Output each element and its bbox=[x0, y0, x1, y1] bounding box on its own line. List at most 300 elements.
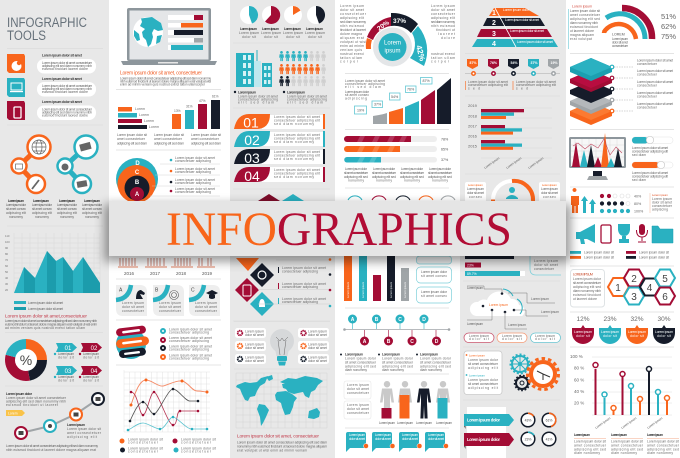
line chart legend: Lorem ipsum dolor sit bbox=[128, 438, 163, 442]
sliders: sed diam bbox=[632, 178, 646, 182]
y axis: 50 bbox=[5, 270, 9, 274]
dot rating: 80% bbox=[634, 202, 642, 206]
bar chart: 47% bbox=[199, 99, 206, 103]
yellow tag bbox=[6, 410, 25, 416]
note text: sit amet consec bbox=[345, 93, 369, 97]
outlined pills: dolor sit bbox=[469, 337, 489, 341]
person gauge: Lorem ipsum bbox=[541, 187, 558, 191]
hexagon cluster: 6 bbox=[662, 292, 668, 303]
sliders: consectetuer adipiscing elit bbox=[632, 150, 668, 154]
step note: adipiscing elit bbox=[67, 435, 97, 439]
rising bar chart: 76% bbox=[407, 88, 415, 92]
grouped bar chart: Lorem ipsum bbox=[483, 156, 501, 170]
lollipop chart: 60 % bbox=[574, 378, 584, 382]
lollipop chart: 80 % bbox=[574, 366, 584, 370]
diamond icons: consectetuer adipiscing bbox=[282, 285, 318, 289]
tall bars: Lorem ipsum bbox=[361, 281, 365, 298]
pyramid bbox=[472, 8, 558, 48]
title: INFOGRAPHIC bbox=[7, 15, 87, 30]
percent drops: Lorem ipsum bbox=[601, 330, 619, 334]
diamond icons: consectetuer adipiscing bbox=[282, 270, 318, 274]
heading: Lorem ipsum bbox=[572, 4, 592, 8]
progress bars: Lorem ipsum dolor bbox=[401, 167, 424, 171]
pie charts: Lorem ipsum bbox=[305, 31, 325, 35]
y axis: 30 bbox=[5, 282, 9, 286]
circle timeline: C bbox=[410, 339, 414, 345]
progress bars: Lorem ipsum dolor bbox=[429, 167, 452, 171]
cloud diagram: Lorem ipsum bbox=[531, 297, 549, 301]
side text columns: dolore magna bbox=[340, 32, 362, 36]
progress tags: 89.7% bbox=[467, 272, 477, 276]
speech bubbles: Lorem ipsum bbox=[402, 433, 418, 437]
bottom text bbox=[6, 444, 98, 452]
rating note: consectetuer bbox=[652, 204, 673, 208]
grouped bar chart: 2019 bbox=[468, 103, 478, 108]
layer text: Lorem ipsum dolor sit amet bbox=[637, 91, 673, 95]
panel: right column top bbox=[568, 4, 676, 347]
numbered ribbons: Lorem ipsum dolor sit amet bbox=[274, 150, 320, 154]
bulb cards: Lorem ipsum bbox=[308, 330, 327, 334]
sliders: consectetuer adipiscing elit bbox=[632, 174, 668, 178]
center caption bbox=[612, 32, 629, 48]
three text columns: amet consectetuer bbox=[154, 137, 183, 141]
three text columns: Lorem ipsum dolor sit bbox=[117, 133, 147, 137]
teal node network bbox=[58, 136, 98, 193]
diamond icons bbox=[235, 258, 331, 316]
timeline notes: diam nonummy bbox=[382, 368, 404, 372]
year ticks: 2019 bbox=[202, 271, 213, 276]
pie charts: Lorem ipsum bbox=[262, 27, 279, 31]
sliders: sed diam bbox=[632, 153, 646, 157]
cards A B C: consectetuer bbox=[195, 309, 218, 313]
sphere legend: Lorem ipsum dolor sit amet bbox=[169, 344, 212, 348]
timeline notes: Lorem ipsum bbox=[420, 352, 438, 356]
progress bars: 78% bbox=[441, 138, 449, 142]
horizontal bars: Lorem bbox=[135, 107, 145, 111]
cards A B C: dolor sit amet bbox=[122, 305, 144, 309]
speech bubbles: Lorem ipsum bbox=[375, 433, 391, 437]
progress bars: Lorem ipsum dolor bbox=[373, 167, 396, 171]
cloud diagram: Lorem ipsum bbox=[508, 323, 526, 327]
four text columns: Lorem ipsum dolor bbox=[57, 203, 78, 207]
bulb cards: dolor sit amet bbox=[308, 333, 327, 337]
three text notes: Lorem ipsum dolor sit bbox=[574, 440, 606, 444]
timeline notes: Lorem ipsum dolor bbox=[382, 356, 414, 360]
y axis: 20 bbox=[5, 288, 9, 292]
two bullet notes: elit sed diam bbox=[238, 100, 274, 104]
pyramid: 2 bbox=[492, 20, 496, 27]
two bullet notes: consectetuer adipiscing bbox=[238, 98, 278, 102]
three text notes: diam nonummy bbox=[647, 451, 673, 455]
gear note card: Lorem ipsum dolor bbox=[468, 378, 499, 382]
y axis: 60 bbox=[5, 264, 9, 268]
center caption: Lorem ipsum bbox=[612, 37, 628, 41]
people figures: Lorem ipsum bbox=[397, 421, 413, 425]
speech bubbles: dolor sit amet bbox=[402, 437, 418, 441]
year ticks: 2018 bbox=[176, 271, 187, 276]
tall bars: Lorem ipsum bbox=[346, 281, 350, 298]
y axis bbox=[5, 234, 10, 292]
sliders: Lorem ipsum dolor sit amet bbox=[632, 146, 668, 150]
bulb cards: dolor sit amet bbox=[308, 359, 327, 363]
teal note cards: Lorem ipsum dolor bbox=[421, 290, 448, 294]
four text columns: Lorem ipsum bbox=[33, 199, 49, 203]
person gauge: consec bbox=[469, 195, 482, 199]
cloud diagram: Lorem ipsum bbox=[467, 286, 483, 290]
semicircle progress bbox=[604, 8, 652, 39]
lorem card: diam nonummy nibh bbox=[573, 289, 601, 293]
progress bars: 37% bbox=[441, 158, 449, 162]
step note: Lorem ipsum dolor sit bbox=[67, 427, 101, 431]
lorem card: sit amet consectetuer bbox=[573, 281, 602, 285]
arrow labels: Lorem ipsum bbox=[83, 352, 99, 356]
timeline notes: Lorem ipsum dolor bbox=[420, 356, 452, 360]
percent drops: dolor sit bbox=[630, 334, 644, 338]
timeline notes: sit amet consectetuer bbox=[382, 360, 414, 364]
line chart legend: consectetuer bbox=[181, 440, 212, 444]
two bullet notes: consectetuer adipiscing bbox=[287, 98, 327, 102]
step tags: 87% bbox=[470, 61, 477, 65]
grid bbox=[14, 233, 100, 293]
area chart bbox=[14, 251, 100, 293]
cloud diagram bbox=[467, 286, 559, 329]
bulb cards: dolor sit amet bbox=[245, 346, 264, 350]
radial percent chart: 37% bbox=[393, 18, 406, 25]
legend list: Lorem ipsum dolor sit amet bbox=[175, 167, 215, 171]
text block: Lorem ipsum dolor sit amet consectetuer adipiscing elit sed diam nonummy nibh bbox=[5, 319, 97, 323]
progress tags bbox=[465, 256, 525, 276]
map heading: Lorem ipsum dolor sit amet, consectetuer bbox=[237, 434, 319, 440]
tool list: Lorem ipsum dolor sit amet consectetuer bbox=[42, 84, 93, 88]
three text columns: adipiscing elit sed diam bbox=[117, 142, 147, 146]
people note cards: Lorem ipsum bbox=[347, 383, 369, 387]
three text notes: amet consectetuer bbox=[611, 444, 644, 448]
note card: dolor sit amet bbox=[534, 263, 558, 267]
side text columns: adipiscing elit bbox=[340, 16, 364, 20]
numbered ribbons bbox=[234, 114, 325, 184]
legend list: Lorem ipsum dolor sit amet bbox=[175, 156, 215, 160]
circle timeline: A bbox=[363, 339, 367, 345]
pie charts: Lorem ipsum bbox=[284, 27, 301, 31]
arrow labels: dolor sit bbox=[83, 356, 99, 360]
hexagon cluster: 4 bbox=[647, 283, 653, 294]
lorem card bbox=[570, 270, 604, 307]
text block: ad minim veniam quis nostrud exerci tation ullam bbox=[5, 326, 85, 330]
pyramid: Lorem ipsum dolor sit amet bbox=[505, 18, 539, 22]
speech bubbles: Lorem ipsum bbox=[349, 433, 365, 437]
tool list: adipiscing elit sed diam nonummy nibh bbox=[42, 64, 92, 68]
pie charts: Lorem ipsum bbox=[240, 27, 257, 31]
rising bar chart bbox=[354, 78, 451, 124]
note card: consectetuer bbox=[534, 267, 555, 271]
y axis: 80 bbox=[5, 252, 9, 256]
horizontal bars: Lorem bbox=[139, 113, 149, 117]
person gauge: dolor sit amet bbox=[467, 191, 484, 195]
side note: euismod tincidunt bbox=[570, 25, 598, 29]
icon legend: Lorem ipsum dolor sit bbox=[584, 250, 614, 254]
center caption: LOREM bbox=[612, 32, 625, 36]
light bulb bbox=[270, 329, 294, 366]
arrow labels: Lorem ipsum bbox=[58, 375, 74, 379]
lollipop chart: 100 % bbox=[570, 354, 583, 359]
legend list: consectetuer adipiscing bbox=[175, 181, 211, 185]
sliders bbox=[632, 136, 673, 182]
side note: amet consectetuer bbox=[570, 13, 601, 17]
text block: Lorem ipsum dolor sit amet consectetuer adipiscing elit sed diam nonummy bbox=[120, 76, 211, 80]
lollipop chart: Lorem ipsum bbox=[594, 416, 612, 430]
progress bars: sit amet consectetuer bbox=[400, 171, 425, 175]
cards A B C: Lorem ipsum bbox=[122, 301, 144, 305]
grouped bar chart: Lorem ipsum bbox=[527, 156, 545, 170]
monitor chart bbox=[569, 133, 626, 180]
panel: tall bars and timeline bbox=[340, 256, 452, 452]
timeline text: Lorem ipsum dolor bbox=[6, 392, 33, 396]
numbered ribbons: 04 bbox=[244, 168, 260, 184]
pyramid: Lorem ipsum dolor sit amet bbox=[517, 40, 553, 44]
percentage rings: 41% bbox=[546, 437, 552, 441]
side text columns: Lorem ipsum bbox=[340, 4, 364, 8]
arrow labels: dolor sit bbox=[58, 356, 74, 360]
gear note card: Lorem ipsum dolor bbox=[468, 358, 499, 362]
tool list: Lorem ipsum dolor sit amet bbox=[42, 100, 83, 104]
cards A B C bbox=[116, 285, 220, 316]
timeline notes: Lorem ipsum dolor bbox=[345, 356, 377, 360]
bottom text: nibh euismod tincidunt ut laoreet dolore magna aliquam erat bbox=[6, 448, 96, 452]
circle timeline: B bbox=[375, 317, 379, 323]
three text notes: amet consectetuer bbox=[574, 444, 607, 448]
four text columns: nonummy bbox=[9, 215, 23, 219]
pie charts: dolor sit bbox=[242, 35, 256, 39]
three text columns: adipiscing elit sed diam bbox=[154, 142, 184, 146]
cards A B C: dolor sit amet bbox=[195, 305, 217, 309]
progress bars: sit amet consectetuer bbox=[372, 171, 397, 175]
year ticks: 2017 bbox=[150, 271, 161, 276]
bar chart: 31% bbox=[186, 104, 193, 108]
sphere legend: consectetuer adipiscing bbox=[169, 339, 209, 343]
side text columns: laoreet bbox=[438, 32, 455, 36]
three text notes: Lorem ipsum bbox=[574, 433, 590, 437]
four text columns bbox=[6, 199, 103, 219]
step tags: consectetuer adipiscing elit bbox=[516, 83, 556, 87]
side note: ut laoreet dolore bbox=[570, 29, 594, 33]
ribbons: Lorem ipsum dolor bbox=[467, 418, 500, 422]
tool list: Lorem ipsum dolor sit amet bbox=[42, 77, 83, 81]
arrow labels bbox=[54, 343, 102, 382]
three text columns: Lorem ipsum dolor sit bbox=[154, 133, 184, 137]
diamond icons: consectetuer adipiscing bbox=[282, 300, 318, 304]
person gauge: Lorem ipsum bbox=[467, 187, 484, 191]
bar chart: 61% bbox=[212, 94, 219, 98]
note text: elit sed diam bbox=[345, 85, 381, 89]
panel: years and line chart bbox=[116, 258, 220, 454]
gear note card: Lorem ipsum bbox=[469, 354, 486, 358]
timeline notes: sit amet consectetuer bbox=[420, 360, 452, 364]
text block: enim ad minim veniam quis nostrud exerci tation ullamcorper bbox=[120, 82, 206, 86]
four text columns: sit amet consec bbox=[6, 207, 26, 211]
tall bars bbox=[344, 256, 409, 301]
line chart legend: consectetuer bbox=[128, 450, 159, 454]
four text columns: adipiscing elit bbox=[57, 211, 77, 215]
grouped bar chart: Lorem ipsum bbox=[505, 156, 523, 170]
icons row bbox=[576, 224, 673, 244]
arrow labels: dolor sit bbox=[58, 378, 74, 382]
gear note card: adipiscing elit bbox=[468, 386, 498, 390]
side text columns: consectetuer bbox=[431, 12, 456, 16]
pie charts: dolor sit bbox=[308, 35, 322, 39]
side text columns: nostrud exerci bbox=[431, 52, 455, 56]
numbered ribbons: sed diam nonummy bbox=[274, 157, 314, 161]
bulb cards: Lorem ipsum bbox=[308, 356, 327, 360]
icon: teal tile bbox=[7, 78, 25, 97]
house shapes bbox=[258, 194, 304, 201]
cards A B C: Lorem ipsum bbox=[195, 301, 217, 305]
rating note bbox=[650, 193, 673, 213]
pyramid: 4 bbox=[492, 41, 496, 48]
side text columns: nibh euismod bbox=[340, 24, 364, 28]
panel: hexagons and lollipops bbox=[570, 270, 680, 455]
three text columns: amet consectetuer bbox=[191, 137, 220, 141]
dot rating: 40% bbox=[634, 194, 642, 198]
progress bars: adipiscing elit sed bbox=[400, 175, 424, 179]
two bullet notes: elit sed diam bbox=[287, 100, 323, 104]
line chart legend: consectetuer bbox=[128, 440, 159, 444]
cloud diagram: Lorem ipsum bbox=[489, 303, 508, 307]
four text columns: Lorem ipsum bbox=[59, 199, 75, 203]
cards A B C: A bbox=[119, 288, 123, 294]
concentric circles: A bbox=[135, 192, 140, 198]
side text columns bbox=[340, 4, 456, 64]
circle timeline: B bbox=[387, 339, 391, 345]
side text columns: adipiscing elit bbox=[431, 16, 455, 20]
side note: erat volutpat bbox=[570, 37, 592, 41]
tool list: Lorem ipsum dolor sit amet bbox=[42, 54, 83, 58]
two bullet notes: Lorem ipsum bbox=[287, 90, 305, 94]
note card: Lorem ipsum bbox=[534, 259, 558, 263]
map text bbox=[237, 440, 327, 452]
horizontal bars: Lorem bbox=[144, 119, 154, 123]
four text columns: adipiscing elit bbox=[32, 211, 52, 215]
timeline notes bbox=[340, 352, 452, 372]
outlined pills bbox=[464, 333, 560, 342]
side text columns: tation ullam bbox=[340, 56, 362, 60]
sphere legend: Lorem ipsum dolor sit amet bbox=[169, 336, 212, 340]
numbered ribbons: sed diam nonummy bbox=[274, 122, 314, 126]
timeline text: euismod tincidunt ut laoreet bbox=[6, 403, 58, 407]
outlined pills: Lorem ipsum bbox=[469, 334, 489, 338]
outlined pills: dolor sit bbox=[502, 337, 522, 341]
layer text: consectetuer bbox=[637, 72, 658, 76]
people note cards: consectetuer bbox=[347, 411, 370, 415]
outlined pills: dolor sit bbox=[535, 337, 555, 341]
layer text bbox=[637, 58, 673, 110]
circle timeline: C bbox=[398, 317, 402, 323]
ribbons: Lorem ipsum dolor bbox=[467, 437, 500, 442]
pyramid: 3 bbox=[492, 31, 496, 38]
outlined pills: Lorem ipsum bbox=[535, 334, 555, 338]
progress bars: adipiscing elit sed bbox=[372, 175, 396, 179]
arrow labels: 02 bbox=[91, 346, 98, 352]
timeline text bbox=[6, 392, 67, 407]
grouped bar chart: 2015 bbox=[468, 144, 478, 148]
three text notes: adipiscing elit sed bbox=[647, 448, 679, 452]
numbered ribbons: 01 bbox=[243, 114, 259, 130]
bulb cards: dolor sit amet bbox=[245, 333, 264, 337]
cards A B C: Lorem ipsum bbox=[159, 301, 181, 305]
sphere legend bbox=[161, 328, 212, 360]
three text notes: Lorem ipsum dolor sit bbox=[647, 440, 679, 444]
cloud diagram: Lorem ipsum bbox=[467, 322, 483, 326]
arrow labels: Lorem ipsum bbox=[58, 352, 74, 356]
speech bubbles bbox=[346, 432, 448, 452]
percentage rings: 61% bbox=[546, 418, 552, 422]
cards A B C: consectetuer bbox=[122, 309, 145, 313]
arrow labels: dolor sit bbox=[83, 378, 99, 382]
people note cards: dolor sit amet bbox=[347, 407, 369, 411]
people pictogram bbox=[279, 51, 326, 86]
pie charts: Lorem ipsum bbox=[283, 31, 303, 35]
legend list: Lorem ipsum dolor sit amet bbox=[175, 187, 215, 191]
side note bbox=[568, 9, 601, 49]
horizontal bars bbox=[118, 107, 159, 129]
side text columns: Lorem ipsum bbox=[431, 4, 455, 8]
line chart legend: Lorem ipsum dolor sit bbox=[181, 438, 216, 442]
icon legend bbox=[570, 250, 669, 260]
cards A B C: consectetuer bbox=[159, 309, 182, 313]
two bullet notes: Lorem ipsum bbox=[238, 90, 256, 94]
panel: diamonds bulb map bbox=[234, 258, 331, 452]
side text columns: consectetuer bbox=[340, 12, 367, 16]
person gauge bbox=[465, 181, 560, 202]
laptop with globe bbox=[121, 8, 217, 65]
map text: nonummy nibh euismod tincidunt ut laoreet dolore magna aliquam bbox=[237, 444, 327, 448]
note card bbox=[530, 256, 561, 275]
numbered ribbons: consectetuer adipiscing elit bbox=[274, 136, 320, 140]
progress bars: sit amet consectetuer bbox=[428, 171, 453, 175]
percent drops: Lorem ipsum bbox=[628, 330, 646, 334]
rating note: Lorem ipsum bbox=[652, 197, 672, 201]
layer text: Lorem ipsum dolor sit amet bbox=[637, 80, 673, 84]
line chart bbox=[124, 370, 210, 432]
timeline notes: adipiscing elit sed bbox=[420, 364, 451, 368]
progress bars: Lorem ipsum dolor bbox=[345, 167, 368, 171]
note text: Lorem ipsum dolor sit amet bbox=[345, 79, 385, 83]
white backing bbox=[467, 407, 506, 458]
gear note card bbox=[464, 351, 502, 394]
four text columns: Lorem ipsum dolor bbox=[82, 203, 103, 207]
hexagon cluster: 5 bbox=[662, 274, 668, 285]
bulb cards: Lorem ipsum bbox=[245, 356, 264, 360]
percent drops: dolor sit bbox=[603, 334, 617, 338]
pyramid: Lorem ipsum dolor sit amet bbox=[510, 29, 544, 33]
tool list: Lorem ipsum dolor sit amet consectetuer bbox=[42, 108, 93, 112]
people figures: Lorem ipsum bbox=[379, 421, 395, 425]
people figures: Lorem ipsum bbox=[416, 421, 432, 425]
note text: Lorem ipsum dolor bbox=[345, 90, 370, 94]
step tags: Lorem ipsum dolor sit amet bbox=[468, 80, 508, 84]
side text columns: tincidunt ut laoreet bbox=[340, 28, 366, 32]
four text columns: sit amet consec bbox=[82, 207, 102, 211]
concentric circles bbox=[116, 158, 220, 203]
layer text: consectetuer bbox=[637, 84, 658, 88]
three text notes bbox=[574, 433, 680, 455]
numbered ribbons: Lorem ipsum dolor sit amet bbox=[274, 133, 320, 137]
person gauge: dolor sit amet bbox=[541, 191, 558, 195]
timeline notes: Lorem ipsum bbox=[345, 352, 363, 356]
gear note card: Lorem ipsum bbox=[469, 374, 486, 378]
progress bars: nonummy bbox=[376, 178, 392, 182]
percentage rings: 43% bbox=[525, 418, 531, 422]
lorem card: LOREM IPSUM bbox=[573, 272, 593, 276]
